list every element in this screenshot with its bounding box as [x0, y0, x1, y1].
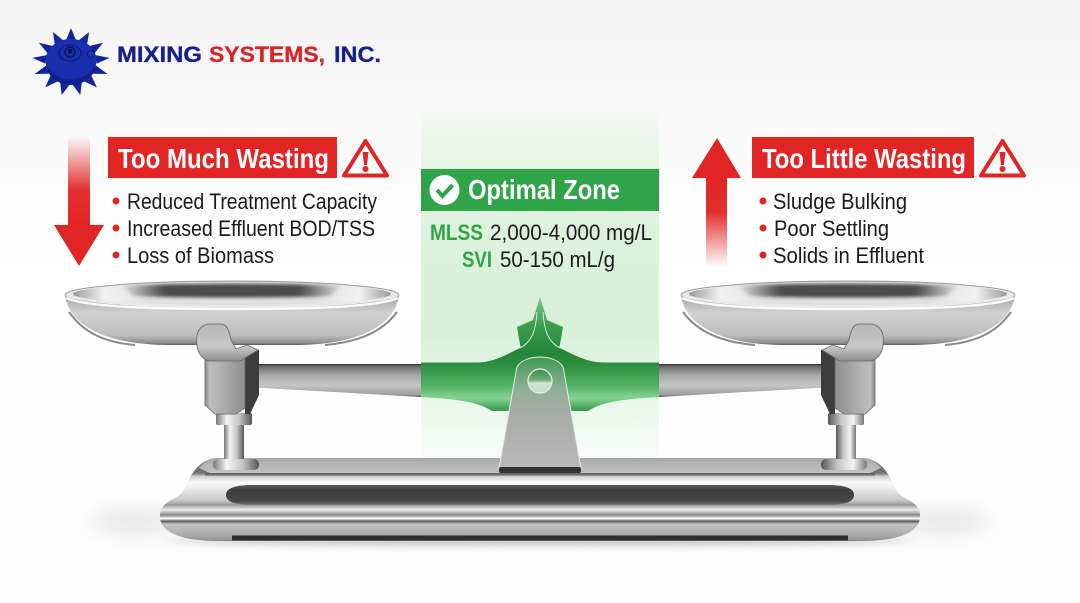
- list: effects of too much wasting: [112, 189, 377, 268]
- values: MLSS and SVI: SVI: [462, 247, 492, 272]
- heading: too little wasting: [752, 137, 974, 178]
- panel: too much wasting: [54, 137, 387, 268]
- list: effects of too much wasting: Increased Effluent BOD/TSS: [127, 216, 375, 241]
- scale base: [160, 458, 920, 541]
- arrow: down: [54, 137, 104, 266]
- scale beam: [246, 340, 834, 411]
- heading: optimal zone: Optimal Zone: [468, 174, 620, 205]
- left pan assembly: [65, 281, 399, 470]
- icon: warning triangle: [981, 141, 1024, 176]
- list: effects of too much wasting: Loss of Biomass: [127, 243, 274, 268]
- values: MLSS and SVI: MLSS: [430, 220, 483, 245]
- company name: SYSTEMS,: [209, 42, 325, 67]
- heading: too little wasting: Too Little Wasting: [762, 143, 966, 174]
- values: MLSS and SVI: 2,000-4,000 mg/L: [490, 220, 652, 245]
- icon: blue gear: [32, 28, 110, 96]
- company name: MIXING: [117, 42, 202, 67]
- values: MLSS and SVI: [430, 220, 652, 272]
- balance scale: [65, 281, 1015, 545]
- company name: INC.: [334, 42, 381, 67]
- heading: optimal zone: [421, 169, 659, 211]
- panel: optimal zone text: [421, 169, 659, 272]
- scale pointer: [517, 297, 563, 356]
- list: effects of too little wasting: Poor Settling: [774, 216, 889, 241]
- arrow: up: [692, 138, 741, 267]
- panel: too little wasting: [692, 137, 1024, 268]
- icon: warning triangle: [344, 141, 387, 176]
- list: effects of too little wasting: Sludge Bulking: [773, 189, 907, 214]
- list: effects of too much wasting: Reduced Treatment Capacity: [127, 189, 377, 214]
- values: MLSS and SVI: 50-150 mL/g: [500, 247, 615, 272]
- logo: [32, 28, 381, 96]
- list: effects of too little wasting: Solids in Effluent: [773, 243, 924, 268]
- list: effects of too little wasting: [760, 189, 924, 268]
- heading: too much wasting: [108, 137, 337, 178]
- scale shadow: [90, 510, 990, 545]
- heading: too much wasting: Too Much Wasting: [118, 143, 329, 174]
- right pan assembly: [681, 281, 1015, 470]
- scale fulcrum: [499, 357, 581, 473]
- panel: optimal zone green band: [421, 106, 659, 476]
